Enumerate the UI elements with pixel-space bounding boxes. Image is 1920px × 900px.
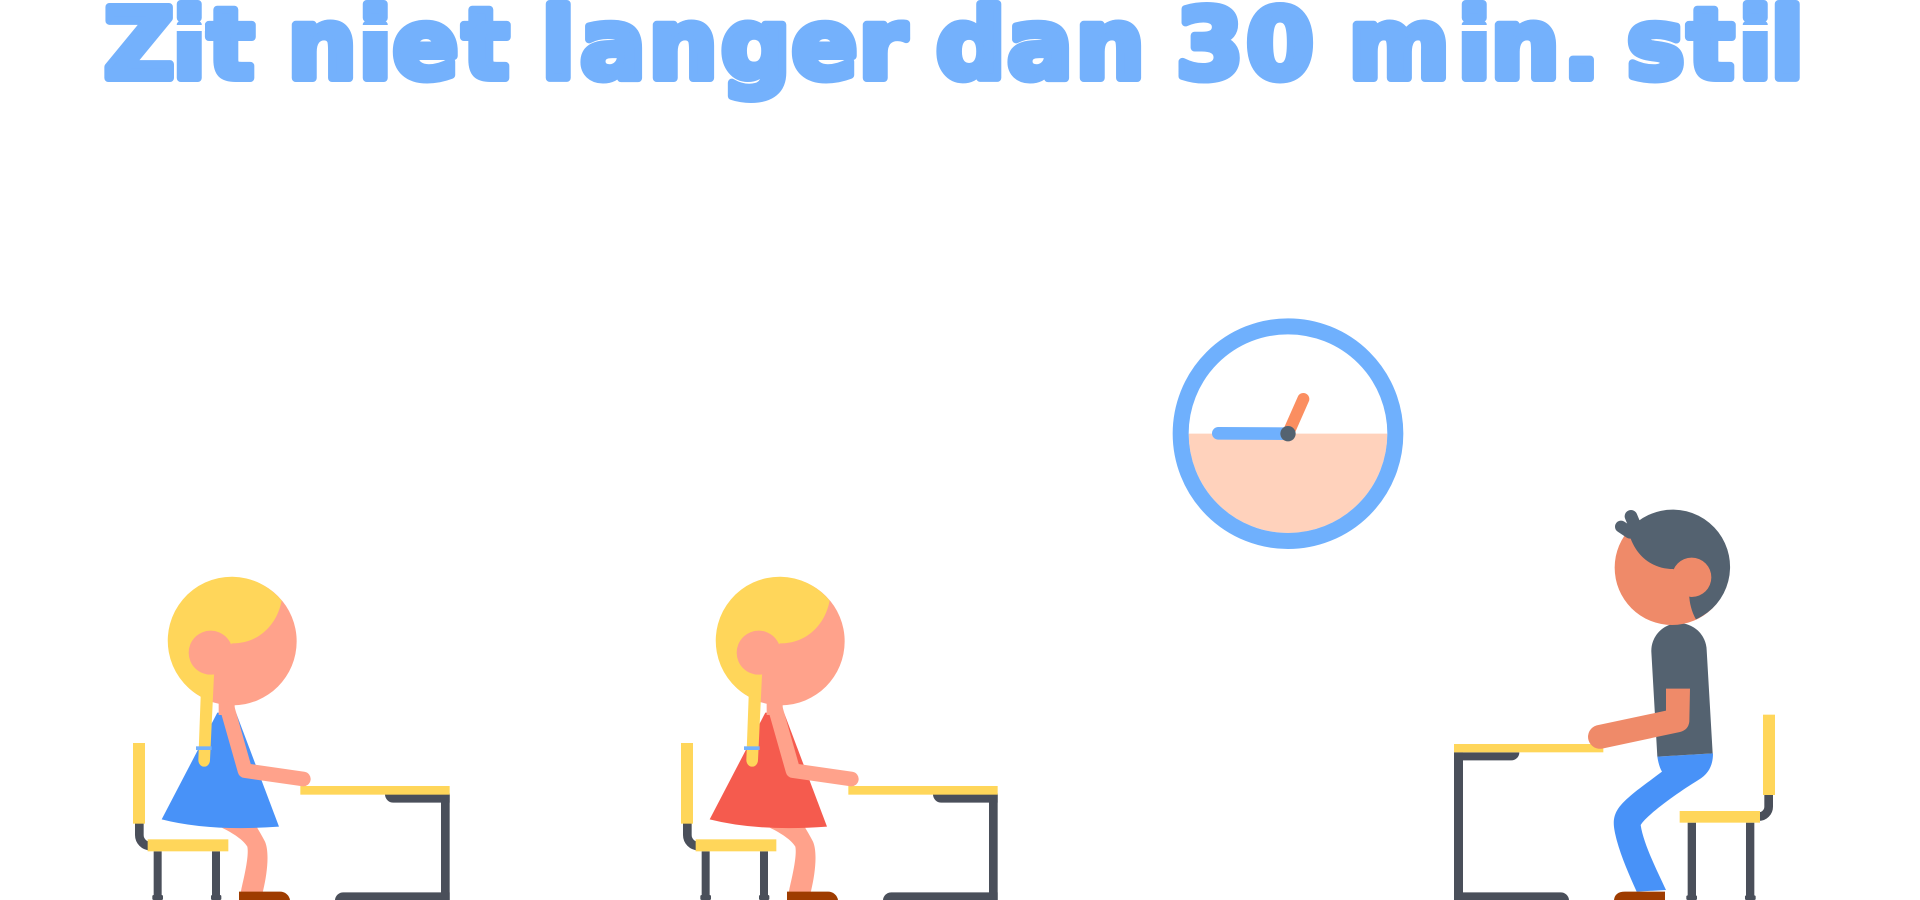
figure: girl in blue dress at desk xyxy=(133,577,450,900)
figure: girl in red dress at desk xyxy=(681,577,998,900)
figure: boy at desk xyxy=(1454,510,1775,900)
icon: wall clock xyxy=(1181,326,1395,541)
